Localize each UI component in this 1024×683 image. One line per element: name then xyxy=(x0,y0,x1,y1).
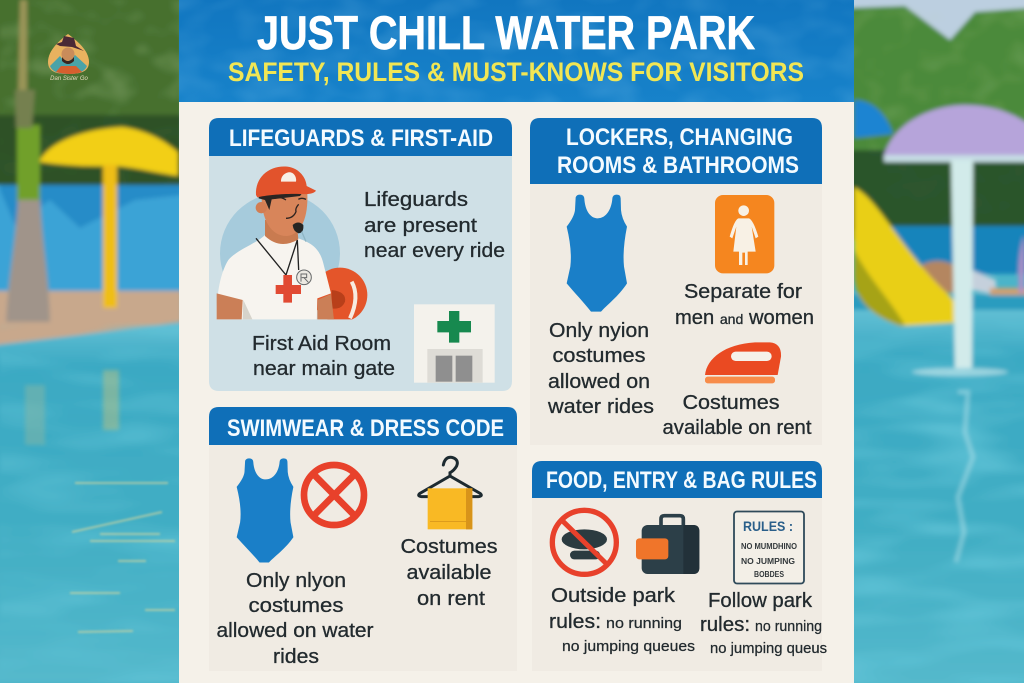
heading: food rules: FOOD, ENTRY & BAG RULES xyxy=(546,467,817,494)
subtitle: SAFETY, RULES & MUST-KNOWS FOR VISITORS xyxy=(228,57,804,87)
text: nylon costumes: allowed on water xyxy=(216,620,374,642)
text: costumes for rent xyxy=(400,536,498,610)
text: outside park rules: rules: xyxy=(549,611,601,633)
text: nyion costumes: Only nyion xyxy=(549,320,649,342)
icon: rules sign: NO JUMPING xyxy=(741,557,795,566)
text: costumes available on rent xyxy=(662,392,812,439)
heading: lockers: ROOMS & BATHROOMS xyxy=(557,152,799,179)
text: separate for men and women: Separate for xyxy=(684,281,802,303)
text: nylon costumes: costumes xyxy=(248,595,344,617)
text: costumes for rent: on rent xyxy=(417,588,485,610)
text: follow park rules: rules: xyxy=(700,614,750,636)
text: lifeguards present: Lifeguards xyxy=(364,189,468,211)
icon: rules sign: BOBDES xyxy=(754,570,785,579)
text: nylon costumes xyxy=(216,570,374,668)
text: follow park rules xyxy=(700,590,827,657)
background: water reflections left xyxy=(25,370,119,445)
text: nylon costumes: rides xyxy=(273,646,319,668)
text: nylon costumes: Only nlyon xyxy=(246,570,346,592)
text: lifeguards present: are present xyxy=(364,215,477,237)
header banner xyxy=(179,0,854,102)
panel: food, entry and bag rules xyxy=(532,461,827,671)
heading: lockers: LOCKERS, CHANGING xyxy=(566,124,793,151)
logo badge: Dan Sister Go xyxy=(50,76,89,82)
icon: swimsuit xyxy=(567,195,627,312)
heading: lifeguards xyxy=(209,118,512,156)
text: costumes available on rent: available on rent xyxy=(662,417,812,439)
icon: iron xyxy=(705,342,781,383)
logo badge xyxy=(48,34,89,82)
icon: women's restroom sign xyxy=(715,195,774,273)
text: separate for men and women: men and women xyxy=(675,307,814,329)
text: outside park rules: Outside park xyxy=(551,585,676,607)
panel: lockers, changing rooms and bathrooms xyxy=(530,118,822,445)
icon: bag xyxy=(636,516,699,574)
icon: hanger with towel xyxy=(419,457,481,529)
heading: lockers xyxy=(530,118,822,184)
text: nyion costumes: allowed on xyxy=(548,371,650,393)
panel: lifeguards and first aid xyxy=(209,118,512,391)
text: lifeguards present: near every ride xyxy=(364,240,505,262)
text: follow park rules: Follow park xyxy=(708,590,813,612)
text: first aid room: First Aid Room xyxy=(252,333,391,355)
text: first aid room xyxy=(252,333,395,380)
text: separate for men and women xyxy=(675,281,814,329)
main panel xyxy=(179,0,854,683)
text: follow park rules: no jumping queus xyxy=(710,640,827,657)
text: costumes for rent: available xyxy=(406,562,492,584)
icon: rules sign: NO MUMDHINO xyxy=(741,542,797,551)
text: costumes for rent: Costumes xyxy=(400,536,498,558)
text: nyion costumes xyxy=(547,320,654,418)
heading: lifeguards: LIFEGUARDS & FIRST-AID xyxy=(229,125,493,152)
heading: swimwear: SWIMWEAR & DRESS CODE xyxy=(227,415,504,442)
text: nyion costumes: water rides xyxy=(547,396,654,418)
background: right water park scene xyxy=(850,0,1024,683)
text: lifeguards present xyxy=(364,189,505,262)
background: water sparkle reflections xyxy=(70,483,175,632)
background: left water park scene xyxy=(0,0,182,683)
text: first aid room: near main gate xyxy=(253,358,395,380)
icon: prohibited sign xyxy=(304,465,364,525)
text: nyion costumes: costumes xyxy=(552,345,646,367)
text: outside park rules: no running xyxy=(606,615,682,632)
icon: swimsuit xyxy=(237,458,293,562)
icon: rules sign xyxy=(734,512,804,584)
text: costumes available on rent: Costumes xyxy=(682,392,780,414)
icon: no outside food xyxy=(552,510,616,574)
icon: rules sign: RULES : xyxy=(743,518,793,534)
icon: lifeguard illustration xyxy=(217,167,367,322)
text: outside park rules xyxy=(549,585,695,655)
heading: food rules xyxy=(532,461,822,498)
panel: swimwear and dress code xyxy=(209,407,517,671)
title: JUST CHILL WATER PARK xyxy=(257,6,755,59)
icon: first aid building xyxy=(414,304,495,383)
heading: swimwear xyxy=(209,407,517,445)
text: follow park rules: no running xyxy=(755,618,822,635)
text: outside park rules: no jumping queues xyxy=(562,638,695,655)
